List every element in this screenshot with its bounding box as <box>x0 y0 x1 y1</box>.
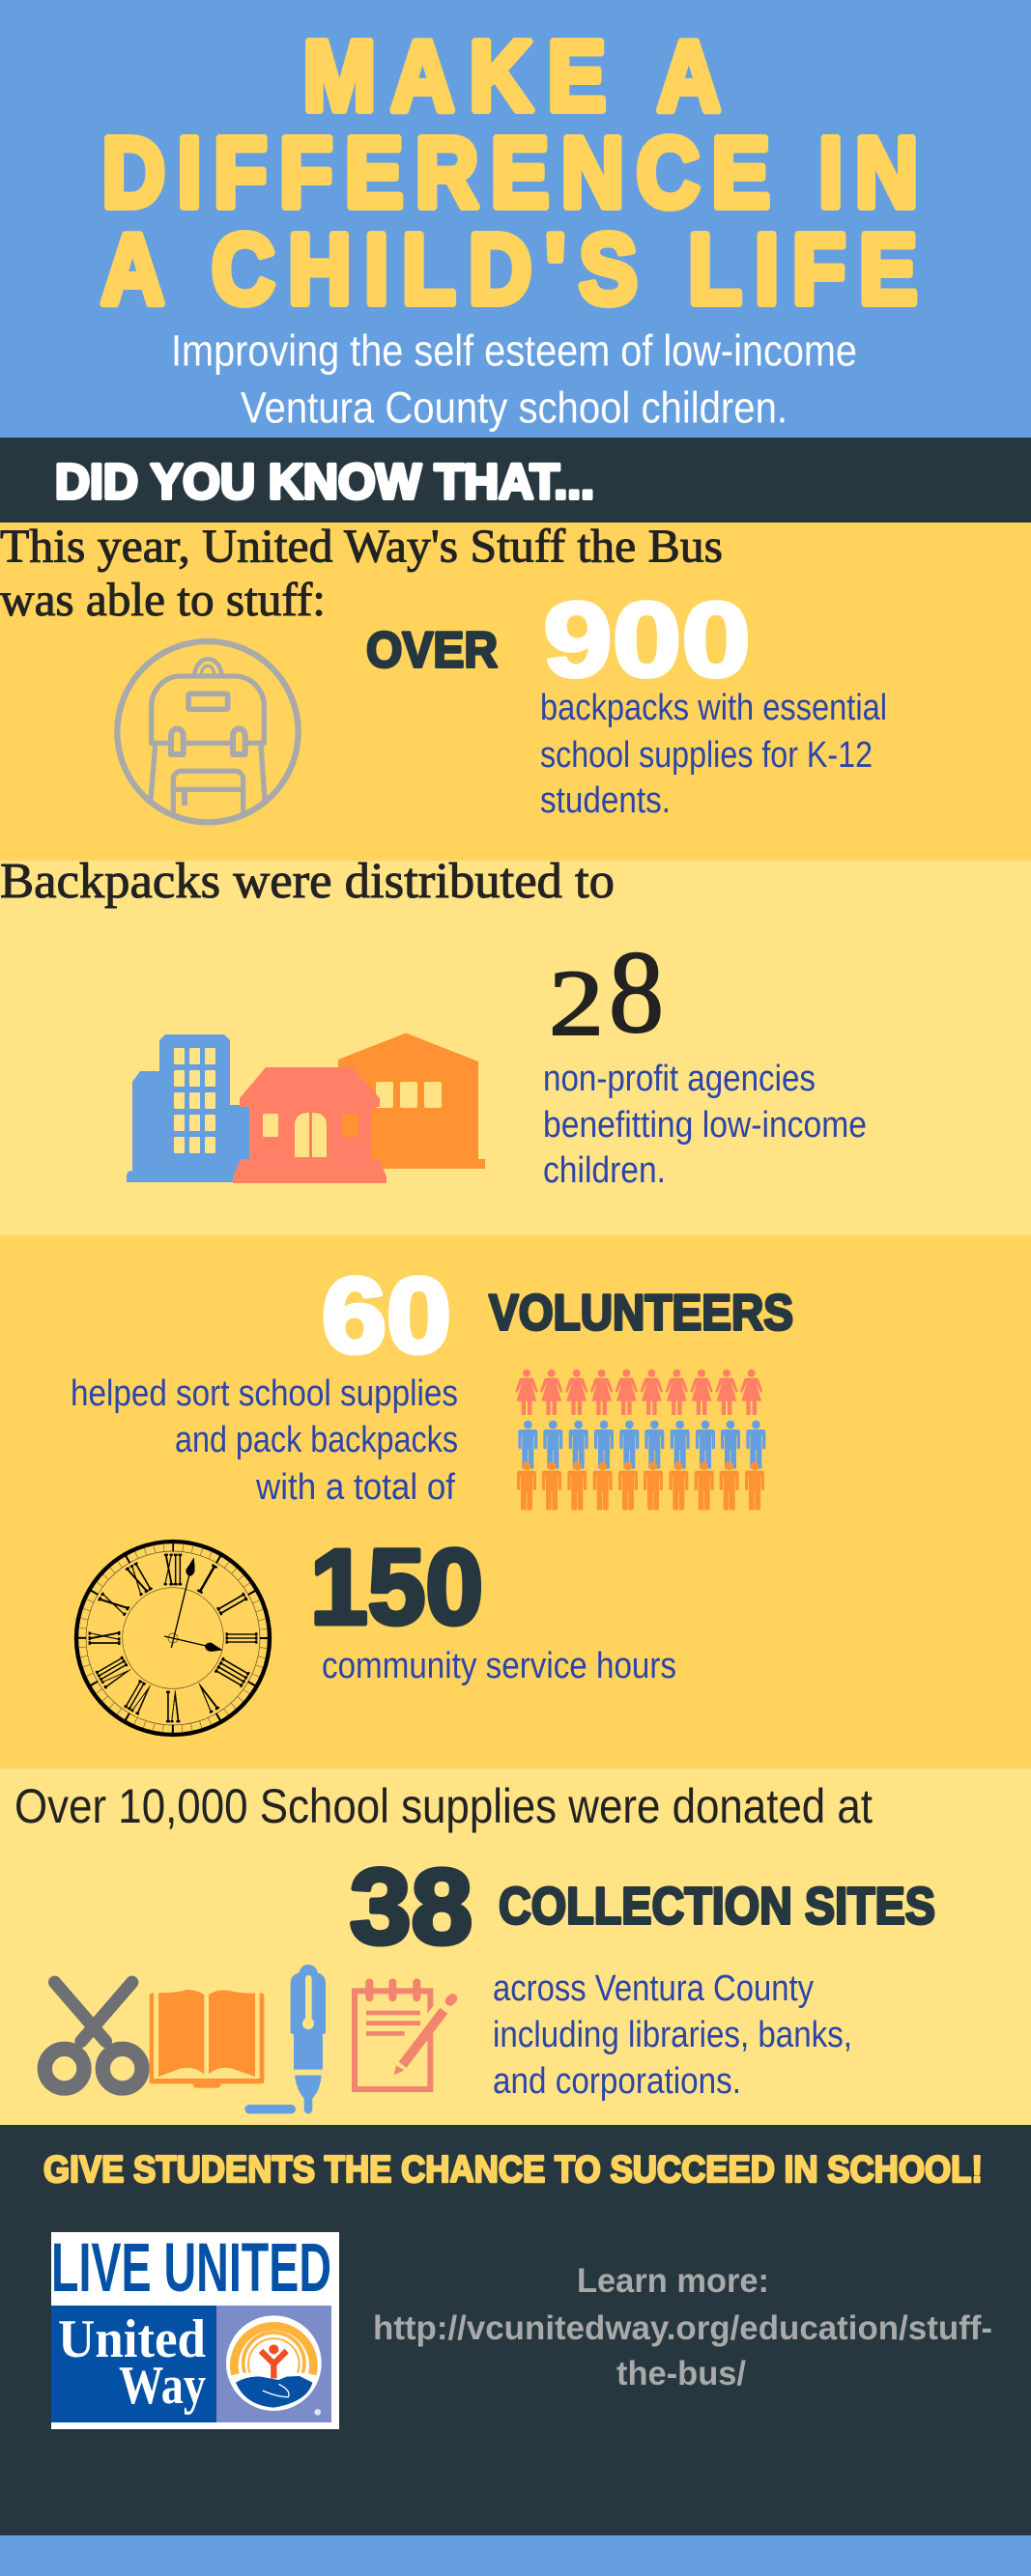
subtitle: Ventura County school children. <box>241 382 788 433</box>
icon: clock: I <box>191 1555 223 1603</box>
logo: United Way: LIVE UNITED <box>51 2230 331 2307</box>
icon: backpack <box>117 641 299 822</box>
icon: school supplies <box>44 1965 457 2113</box>
volunteers description: with a total of <box>255 1467 455 1508</box>
number: 38: 38 <box>350 1848 473 1967</box>
icon: clock: XII <box>163 1544 183 1596</box>
backpacks description <box>540 688 887 821</box>
icon: notepad and pencil <box>355 1978 457 2089</box>
panel: footer call to action <box>0 2125 1031 2535</box>
section intro text: This year, United Way's Stuff the Bus <box>0 520 723 572</box>
icon: clock: VI <box>166 1681 180 1732</box>
icon: scissors <box>44 1982 142 2088</box>
logo: United Way <box>51 2230 339 2429</box>
agencies description: benefitting low-income <box>543 1105 867 1146</box>
section intro text: Backpacks were distributed to <box>0 854 615 909</box>
icon: clock: VII <box>119 1671 159 1724</box>
sites description: including libraries, banks, <box>493 2015 852 2055</box>
panel: volunteers stat <box>0 1235 1031 1769</box>
subtitle: Improving the self esteem of low-income <box>171 326 857 375</box>
agencies description: non-profit agencies <box>543 1059 816 1099</box>
number: 28: 2 <box>549 951 604 1055</box>
icon: clock: III <box>215 1632 267 1644</box>
icon: clock: V <box>189 1672 224 1722</box>
title: A CHILD'S LIFE <box>100 213 917 325</box>
volunteers description <box>71 1373 458 1508</box>
icon: clock: VIII <box>87 1651 141 1694</box>
learn more text <box>373 2262 992 2392</box>
hours description: community service hours <box>322 1646 676 1686</box>
backpacks description: students. <box>540 780 671 821</box>
icon: buildings <box>127 1033 485 1183</box>
title: DIFFERENCE IN <box>102 117 918 228</box>
label: over: OVER <box>366 622 498 678</box>
icon: rows of people <box>515 1370 765 1510</box>
icon: clock: II <box>208 1587 257 1621</box>
volunteers description: and pack backpacks <box>175 1420 458 1460</box>
icon: clock: IX <box>79 1631 130 1645</box>
icon: clock: IIII <box>205 1652 259 1693</box>
icon: pen <box>244 1965 326 2113</box>
section intro text <box>0 520 723 626</box>
icon: clock <box>76 1542 270 1735</box>
learn more text: http://vcunitedway.org/education/stuff- <box>373 2309 992 2347</box>
panel: did you know banner <box>0 438 1031 523</box>
panel: backpacks stat <box>0 520 1031 861</box>
number: 900: 900 <box>543 580 751 699</box>
title: MAKE A <box>303 20 721 131</box>
subtitle <box>171 326 857 433</box>
section intro text: was able to stuff: <box>0 573 326 626</box>
number: 60: 60 <box>322 1257 451 1375</box>
agencies description: children. <box>543 1150 666 1191</box>
panel: agencies stat <box>0 854 1031 1235</box>
icon: clock: XI <box>120 1553 158 1605</box>
agencies description <box>543 1059 867 1191</box>
section intro text: Over 10,000 School supplies were donated at <box>14 1779 873 1833</box>
label: collection sites: COLLECTION SITES <box>499 1878 935 1936</box>
sites description: and corporations. <box>493 2061 741 2102</box>
banner heading: DID YOU KNOW THAT... <box>55 454 594 509</box>
title <box>100 20 918 325</box>
icon: clock: X <box>89 1587 139 1622</box>
sites description: across Ventura County <box>493 1968 814 2009</box>
icon: open book <box>150 1990 264 2088</box>
sites description <box>493 1968 852 2102</box>
panel: bottom blue band <box>0 2535 1031 2576</box>
number: 150: 150 <box>310 1528 483 1647</box>
backpacks description: backpacks with essential <box>540 688 887 728</box>
panel: header <box>0 0 1031 438</box>
label: volunteers: VOLUNTEERS <box>489 1285 793 1341</box>
volunteers description: helped sort school supplies <box>71 1373 458 1414</box>
logo: United Way: Way <box>119 2356 206 2416</box>
number: 28: 8 <box>609 927 664 1058</box>
panel: collection sites stat <box>0 1769 1031 2126</box>
number: 28 <box>549 927 664 1058</box>
backpacks description: school supplies for K-12 <box>540 735 873 776</box>
logo: United Way: United <box>58 2309 206 2369</box>
learn more text: the-bus/ <box>616 2355 746 2392</box>
learn more text: Learn more: <box>577 2262 769 2300</box>
